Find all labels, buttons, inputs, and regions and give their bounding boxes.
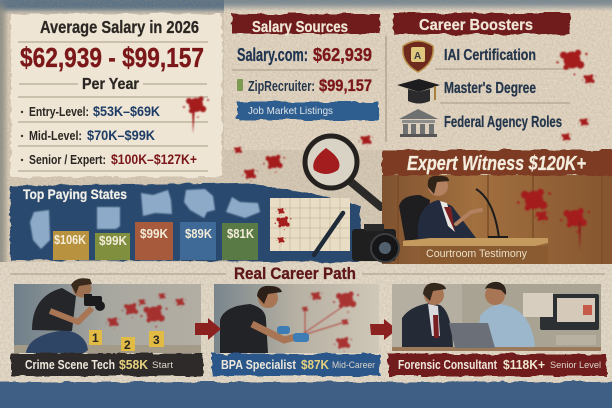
salary sources banner (232, 14, 380, 34)
job market label: Job Market Listings (248, 105, 333, 117)
bar: $99K second: $99K (140, 227, 168, 241)
states blue band (10, 183, 360, 262)
panel: salary sources (232, 14, 380, 120)
BPA caption bar (212, 354, 380, 376)
ziprecruiter row: $99,157 (319, 76, 372, 95)
senior row (21, 152, 197, 167)
salary.com row: Salary.com: (237, 45, 308, 65)
blood on wall (517, 189, 590, 250)
entry-level row (21, 104, 160, 119)
consultant caption: Forensic Consultant (398, 358, 498, 372)
blood splats (556, 50, 596, 143)
wall panels (398, 175, 602, 264)
career boosters heading: Career Boosters (419, 17, 533, 34)
courtroom label: Courtroom Testimony (426, 248, 527, 260)
bar: $99K first: $99K (99, 234, 127, 248)
bar: $89K (180, 222, 216, 260)
witness stand (403, 238, 548, 264)
panel rules (18, 42, 208, 171)
witness chair (399, 195, 430, 240)
ziprecruiter icon (237, 79, 243, 91)
state shapes (30, 189, 260, 249)
bottom blue band (0, 382, 612, 408)
salary sources heading: Salary Sources (252, 19, 348, 36)
consultant in suit (402, 283, 453, 349)
panel: forensic consultant (388, 282, 606, 376)
icon: graduation cap (397, 79, 440, 104)
icon: pen (314, 213, 343, 255)
panel: crime scene tech (11, 278, 203, 376)
BPA caption: Mid-Career (332, 360, 375, 370)
evidence marker 2: 2 (124, 338, 131, 352)
ziprecruiter row (248, 76, 372, 95)
BPA caption: $87K (301, 357, 330, 372)
evidence marker 3: 3 (153, 333, 160, 347)
icon: magnifying glass (305, 136, 381, 207)
arrow: BPA to consultant (370, 319, 397, 340)
evidence marker 1 (89, 330, 102, 345)
analyst (220, 286, 309, 353)
consultant photo (392, 282, 601, 351)
ziprecruiter row: ZipRecruiter: (248, 78, 315, 95)
icon: federal building (399, 109, 438, 137)
evidence marker 2 (121, 337, 135, 352)
master's degree label: Master's Degree (444, 80, 536, 97)
senior row: Senior / Expert: (29, 152, 106, 167)
bar: $106K: $106K (54, 233, 86, 247)
mid-level row: $70K–$99K (87, 128, 155, 143)
blood spatter (106, 293, 186, 329)
consultant caption: Senior Level (550, 360, 601, 370)
evidence marker 1: 1 (92, 331, 99, 345)
BPA photo (214, 284, 379, 353)
job market banner (237, 102, 379, 120)
career boosters banner (393, 13, 570, 34)
colleague in blue shirt (477, 282, 535, 349)
desk (392, 347, 601, 351)
salary paper card (11, 14, 222, 177)
crime scene caption: $58K (119, 357, 149, 372)
mid-level row (21, 128, 155, 143)
small splats near magnifier (233, 135, 373, 182)
salary.com row: $62,939 (313, 45, 372, 65)
icon: camera (352, 224, 399, 262)
consultant caption bar (388, 354, 606, 376)
icon: IAI shield: A (414, 51, 421, 62)
crime scene photo (14, 278, 201, 353)
salary heading: Average Salary in 2026 (40, 17, 199, 37)
microphone (476, 189, 499, 238)
federal agency label: Federal Agency Roles (444, 114, 562, 131)
per year label: Per Year (82, 76, 139, 93)
witness (418, 176, 481, 240)
panel: career boosters (393, 13, 596, 143)
salary range: $62,939 - $99,157 (20, 42, 204, 73)
crime scene caption bar (11, 353, 203, 376)
laptop (449, 323, 495, 348)
heading: real career path: Real Career Path (234, 264, 356, 283)
bar: $81K: $81K (227, 227, 254, 241)
panel: top paying states (10, 183, 360, 262)
panel: expert witness (382, 150, 612, 264)
bar: $106K (53, 231, 89, 260)
blood spatter and strings (300, 291, 359, 352)
crime scene caption: Start (152, 360, 174, 370)
crime scene caption: Crime Scene Tech (25, 358, 115, 372)
bar: $99K first (95, 233, 130, 260)
BPA caption: BPA Specialist (221, 358, 297, 372)
evidence marker 3 (149, 331, 164, 347)
consultant caption: $118K+ (503, 357, 545, 372)
IAI label: IAI Certification (444, 47, 536, 64)
photographer (26, 278, 105, 353)
entry-level row: Entry-Level: (29, 104, 89, 119)
icon: graph paper with blood (270, 198, 350, 251)
expert witness banner (382, 150, 612, 175)
bar: $81K (222, 223, 258, 260)
crime scene caption (25, 357, 174, 372)
panel: BPA specialist (212, 284, 380, 376)
consultant caption (398, 357, 601, 372)
senior row: $100K–$127K+ (111, 152, 197, 167)
panel: average salary (11, 14, 222, 177)
BPA caption (221, 357, 375, 372)
bar: $99K second (135, 222, 173, 260)
arrow: crime scene to BPA (195, 318, 221, 340)
wall monitor and papers (523, 293, 599, 345)
bar: $89K: $89K (185, 227, 212, 241)
blood splat (183, 96, 209, 134)
wood wall (382, 175, 612, 264)
states heading: Top Paying States (23, 186, 127, 202)
entry-level row: $53K–$69K (93, 104, 160, 119)
mid-level row: Mid-Level: (29, 128, 82, 143)
icon: IAI shield (403, 41, 433, 72)
